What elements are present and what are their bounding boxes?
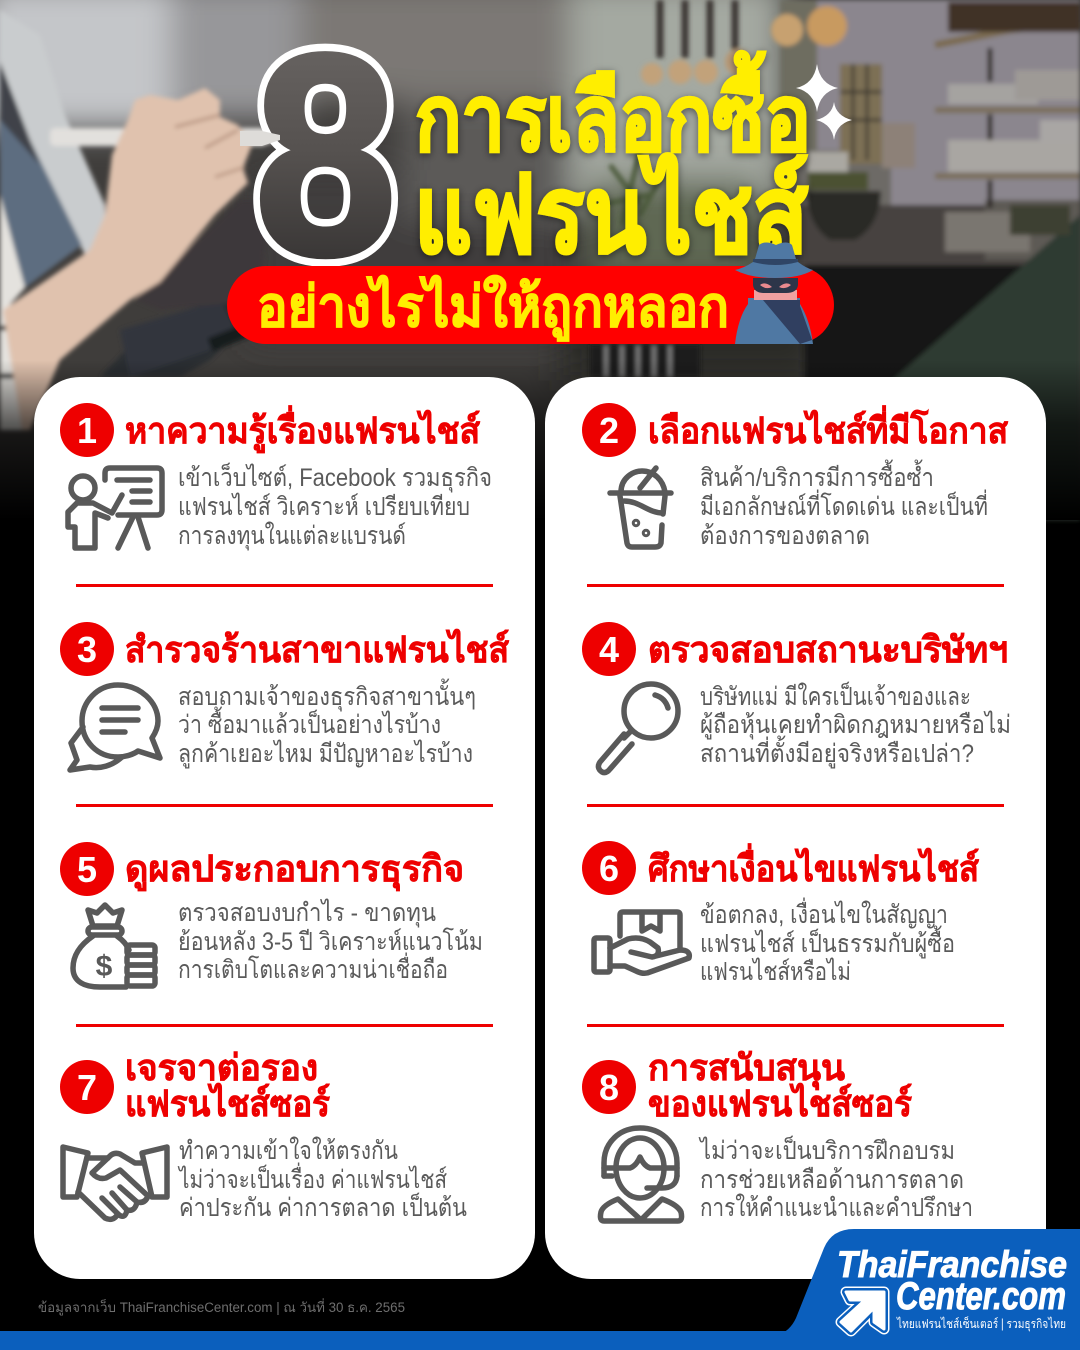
hand and arm xyxy=(3,88,252,430)
step 8 xyxy=(582,1047,973,1222)
blazer, shirt and stripes xyxy=(0,10,105,255)
step 4: บริษัทแม่ มีใครเป็นเจ้าของและ xyxy=(700,681,971,711)
step 7: ไม่ว่าจะเป็นเรื่อง ค่าแฟรนไชส์ xyxy=(177,1162,447,1194)
pen tip over the number xyxy=(240,131,280,146)
icon: drink cup xyxy=(610,468,671,547)
source credit: ข้อมูลจากเว็บ ThaiFranchiseCenter.com | ณ วันที่ 30 ธ.ค. 2565 xyxy=(38,1298,405,1316)
icon: spy in hat and coat xyxy=(735,242,813,344)
step 7: 7 xyxy=(77,1067,97,1108)
step 8: การช่วยเหลือด้านการตลาด xyxy=(700,1166,964,1194)
title: headline lines: แฟรนไชส์ xyxy=(414,153,808,275)
step 6: 6 xyxy=(599,848,619,889)
title: headline lines: การเลือกซื้อ xyxy=(415,51,811,170)
icon: support agent with headset xyxy=(600,1128,682,1221)
step 5: การเติบโตและความน่าเชื่อถือ xyxy=(178,952,448,984)
wall and bar xyxy=(815,0,1080,210)
subtitle pill xyxy=(227,266,834,344)
icon: hand holding box xyxy=(594,912,689,973)
step 1: แฟรนไชส์ วิเคราะห์ เปรียบเทียบ xyxy=(178,492,470,521)
icon: presenter at board xyxy=(68,468,162,548)
icon: speech bubbles xyxy=(70,685,160,770)
shelves xyxy=(935,22,1080,45)
step 1: หาความรู้เรื่องแฟรนไชส์ xyxy=(125,405,480,454)
icon: money bag and coins: $ xyxy=(96,950,113,983)
subtitle pill: อย่างไรไม่ให้ถูกหลอก xyxy=(257,274,729,342)
step 1: เข้าเว็บไซต์, Facebook รวมธุรกิจ xyxy=(178,462,492,493)
step 2: 2 xyxy=(599,410,619,451)
step 2: มีเอกลักษณ์ที่โดดเด่น และเป็นที่ xyxy=(700,489,988,521)
panel: right column xyxy=(545,377,1046,1279)
title: headline lines xyxy=(414,51,811,275)
step 4: สถานที่ตั้งมีอยู่จริงหรือเปล่า? xyxy=(700,735,974,769)
step 8: ของแฟรนไชส์ซอร์ xyxy=(648,1082,913,1124)
step 6: แฟรนไชส์หรือไม่ xyxy=(700,957,851,986)
step 6 xyxy=(582,841,979,986)
step 1: การลงทุนในแต่ละแบรนด์ xyxy=(178,521,406,551)
step 5: 5 xyxy=(77,849,97,890)
step 3 xyxy=(60,622,509,769)
icon: sparkles xyxy=(796,64,852,140)
step 2: เลือกแฟรนไชส์ที่มีโอกาส xyxy=(648,405,1008,451)
plant and chair xyxy=(600,150,665,225)
step 8: 8 xyxy=(599,1067,619,1108)
step 1: 1 xyxy=(77,410,97,451)
step 5: ย้อนหลัง 3-5 ปี วิเคราะห์แนวโน้ม xyxy=(178,927,483,956)
step 3: สอบถามเจ้าของธุรกิจสาขานั้นๆ xyxy=(178,678,476,712)
step 1 xyxy=(60,403,492,551)
step 4: 4 xyxy=(599,629,619,670)
laptop under the arm xyxy=(100,290,250,377)
logo: ThaiFranchise Center.com xyxy=(778,1229,1080,1350)
panel: left column xyxy=(34,377,535,1279)
icon: handshake xyxy=(63,1147,167,1219)
title: big number 8: 8 xyxy=(254,0,397,315)
step 7: เจรจาต่อรอง xyxy=(125,1047,318,1088)
footer blue bar xyxy=(0,1331,1080,1350)
step 3: ว่า ซื้อมาแล้วเป็นอย่างไรบ้าง xyxy=(178,706,441,739)
step 8: การให้คำแนะนำและคำปรึกษา xyxy=(700,1193,973,1222)
step 6: ข้อตกลง, เงื่อนไขในสัญญา xyxy=(700,897,948,929)
icon: logo arrow xyxy=(841,1292,884,1331)
icon: money bag and coins xyxy=(73,905,155,987)
step 7: ทำความเข้าใจให้ตรงกัน xyxy=(179,1136,398,1165)
step 8: การสนับสนุน xyxy=(648,1047,845,1091)
title: big number 8: 8 xyxy=(254,0,397,315)
step 4: ตรวจสอบสถานะบริษัทฯ xyxy=(648,629,1008,670)
step 7: แฟรนไชส์ซอร์ xyxy=(125,1082,331,1124)
step 5: ตรวจสอบงบกำไร - ขาดทุน xyxy=(178,898,436,928)
step 2: สินค้า/บริการมีการซื้อซ้ำ xyxy=(700,459,934,492)
step 4 xyxy=(582,622,1011,769)
step 8: ไม่ว่าจะเป็นบริการฝึกอบรม xyxy=(698,1135,955,1165)
step 7 xyxy=(60,1047,467,1222)
step 7: ค่าประกัน ค่าการตลาด เป็นต้น xyxy=(179,1192,467,1222)
step 2: ต้องการของตลาด xyxy=(700,522,870,550)
step 3: สำรวจร้านสาขาแฟรนไชส์ xyxy=(125,628,509,670)
step 4: ผู้ถือหุ้นเคยทำผิดกฎหมายหรือไม่ xyxy=(700,710,1011,740)
step 5: ดูผลประกอบการธุรกิจ xyxy=(125,848,464,892)
step 6: แฟรนไชส์ เป็นธรรมกับผู้ซื้อ xyxy=(700,925,955,959)
step 3: 3 xyxy=(77,629,97,670)
icon: magnifying glass xyxy=(598,684,678,773)
step 2 xyxy=(582,403,1008,550)
pen xyxy=(50,128,278,146)
step 3: ลูกค้าเยอะไหม มีปัญหาอะไรบ้าง xyxy=(178,739,473,769)
step 6: ศึกษาเงื่อนไขแฟรนไชส์ xyxy=(648,843,979,889)
lamps xyxy=(660,0,735,58)
step 5 xyxy=(60,842,483,984)
